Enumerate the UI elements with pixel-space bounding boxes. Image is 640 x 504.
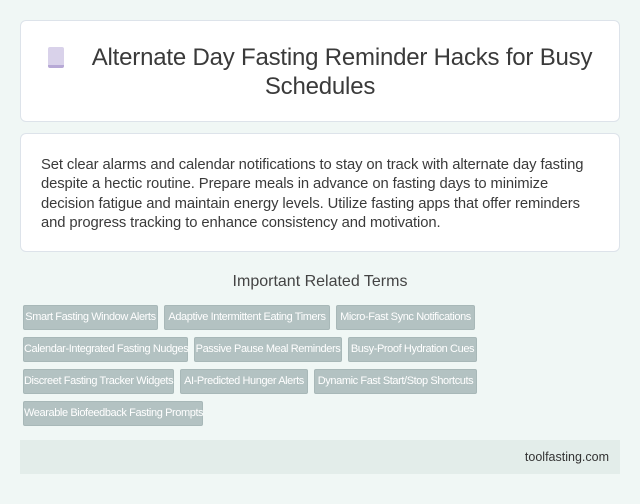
- tags: Dynamic Fast Start/Stop Shortcuts: [318, 375, 473, 387]
- tags: Passive Pause Meal Reminders: [196, 343, 340, 355]
- heading: related terms: Important Related Terms: [233, 273, 407, 290]
- title: Alternate Day Fasting Reminder Hacks for Busy Schedules: [92, 44, 592, 100]
- tags: Discreet Fasting Tracker Widgets: [24, 375, 173, 387]
- footer: [20, 440, 620, 474]
- tags: Calendar-Integrated Fasting Nudges: [24, 343, 188, 355]
- tags: Smart Fasting Window Alerts: [25, 311, 156, 323]
- panel: title card: [20, 20, 620, 122]
- tags: Adaptive Intermittent Eating Timers: [168, 311, 326, 323]
- tags: Micro-Fast Sync Notifications: [340, 311, 471, 323]
- text block: Set clear alarms and calendar notifications to stay on track with alternate day fasting despite a hectic routine. Prepare meals in advance on fasting days to minimize decision fatigue and maintain energy levels. Utilize fasting apps that offer reminders and progress tracking to enhance consistency and motivation.: [41, 157, 583, 231]
- panel: description: [20, 133, 620, 252]
- footer text: toolfasting.com: [525, 450, 609, 464]
- tags: Wearable Biofeedback Fasting Prompts: [24, 407, 203, 419]
- tags: AI-Predicted Hunger Alerts: [184, 375, 304, 387]
- tags: Busy-Proof Hydration Cues: [351, 343, 474, 355]
